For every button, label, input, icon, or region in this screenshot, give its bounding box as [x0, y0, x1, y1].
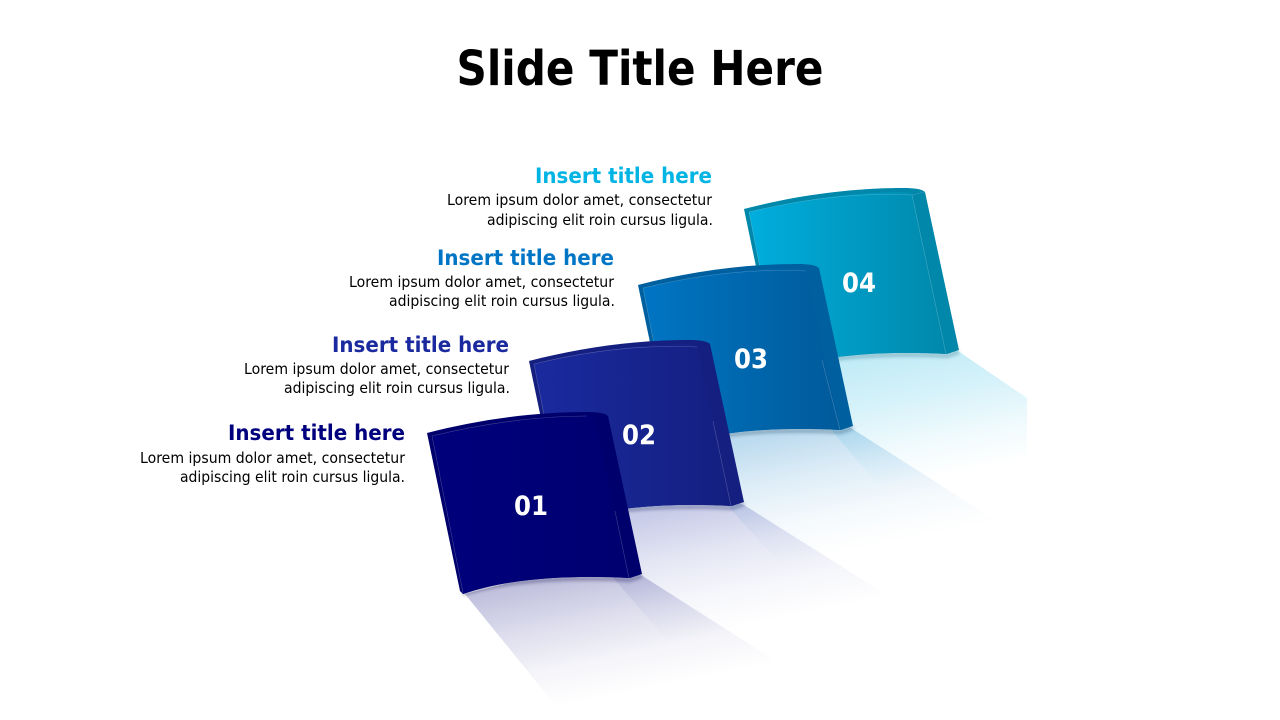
text block 01: Insert title here — [228, 421, 405, 446]
text block 04 — [447, 164, 713, 229]
text block 01: Lorem ipsum dolor amet, consectetur — [140, 449, 406, 467]
number 04: 04 — [842, 268, 876, 299]
floor shadow: step 03 — [674, 410, 1003, 575]
text block 01 — [140, 421, 406, 486]
title: Slide Title Here — [456, 41, 824, 97]
number 01: 01 — [514, 491, 548, 522]
floor shadow: step 04 — [780, 335, 1027, 487]
text block 04: Insert title here — [535, 164, 712, 189]
step 04 card — [744, 188, 959, 370]
floor shadow: step 01 — [465, 560, 782, 705]
text block 02: adipiscing elit roin cursus ligula. — [284, 379, 510, 397]
text block 03: Lorem ipsum dolor amet, consectetur — [349, 273, 615, 291]
text block 02: Lorem ipsum dolor amet, consectetur — [244, 360, 510, 378]
step 03 card — [638, 264, 853, 446]
text block 02 — [244, 333, 510, 397]
text block 04: Lorem ipsum dolor amet, consectetur — [447, 191, 713, 209]
step 02 card — [529, 340, 744, 522]
number 02: 02 — [622, 420, 656, 451]
floor shadow: step 02 — [565, 490, 895, 655]
number 03: 03 — [734, 344, 768, 375]
step 01 card — [427, 412, 642, 594]
text block 01: adipiscing elit roin cursus ligula. — [180, 468, 405, 486]
text block 02: Insert title here — [332, 333, 509, 358]
text block 03: Insert title here — [437, 246, 614, 271]
text block 04: adipiscing elit roin cursus ligula. — [487, 211, 713, 229]
text block 03 — [349, 246, 615, 310]
text block 03: adipiscing elit roin cursus ligula. — [389, 292, 615, 310]
